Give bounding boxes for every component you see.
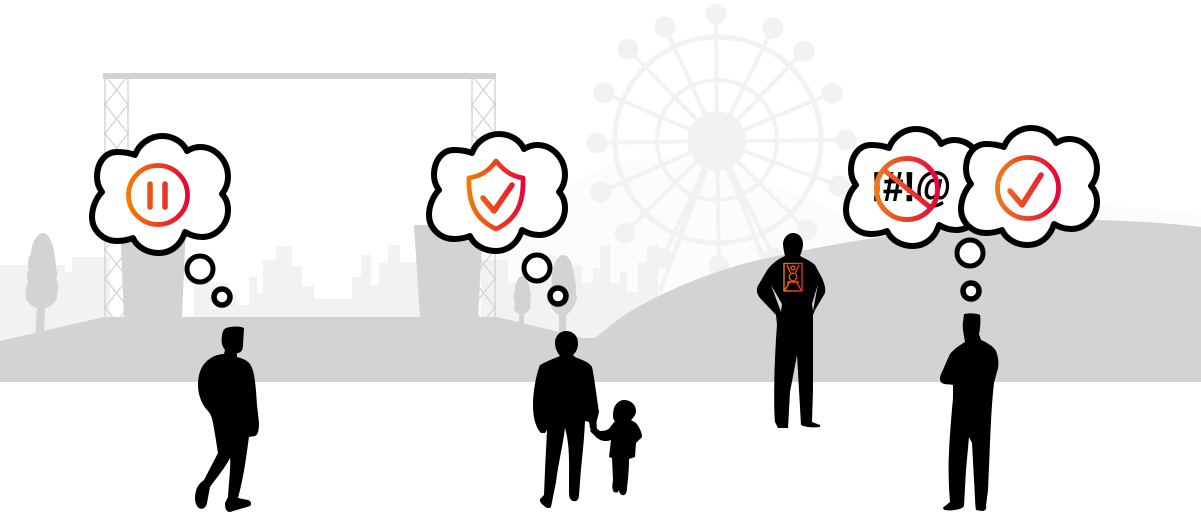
cloud 3 bbox=[846, 129, 982, 246]
person walking bbox=[195, 326, 259, 512]
bubble large bbox=[524, 255, 550, 281]
thought bubble 1 bbox=[92, 136, 230, 305]
skyline left bbox=[0, 257, 110, 345]
icon: check in circle bbox=[998, 158, 1058, 218]
icon: shield with check bbox=[469, 161, 523, 229]
tree left bbox=[26, 233, 58, 337]
badge icon bbox=[784, 264, 802, 291]
icon: pause bbox=[128, 166, 188, 224]
stage truss left bbox=[104, 79, 129, 317]
wheel gondolas bbox=[586, 4, 856, 276]
person adult holding hand bbox=[533, 331, 599, 508]
child bbox=[590, 400, 642, 495]
icon: prohibition sign bbox=[876, 158, 938, 220]
bubble large bbox=[187, 256, 213, 282]
cloud 4 bbox=[961, 128, 1097, 245]
tree small bbox=[514, 276, 531, 326]
silhouette bbox=[757, 233, 825, 428]
arm gaps bbox=[771, 284, 818, 312]
tree large bbox=[550, 255, 577, 334]
person arms crossed bbox=[940, 313, 998, 511]
thought bubble 4 bbox=[957, 128, 1097, 299]
bubble small bbox=[550, 288, 566, 304]
bubble large bbox=[957, 240, 983, 266]
ground bbox=[0, 220, 1201, 382]
symbols text: !#!@ bbox=[871, 163, 951, 210]
city skyline bbox=[0, 245, 658, 345]
cloud 1 bbox=[92, 136, 228, 253]
skyline centre bbox=[194, 245, 420, 320]
thought bubble 2 bbox=[429, 134, 566, 304]
faint distant hill bbox=[420, 158, 1201, 340]
right side screen bbox=[414, 225, 483, 318]
bubble small bbox=[214, 289, 230, 305]
wheel spokes and supports bbox=[597, 14, 846, 292]
cloud 2 bbox=[429, 134, 565, 251]
skyline right bbox=[481, 245, 658, 340]
stage truss right bbox=[471, 79, 496, 317]
wheel hub bbox=[688, 112, 746, 170]
left side screen bbox=[120, 225, 186, 318]
bubble small bbox=[963, 283, 979, 299]
thought bubble 3 bbox=[846, 129, 982, 246]
stage top beam bbox=[103, 73, 496, 79]
person with badge on back bbox=[757, 233, 825, 428]
ferris wheel bbox=[586, 4, 856, 292]
